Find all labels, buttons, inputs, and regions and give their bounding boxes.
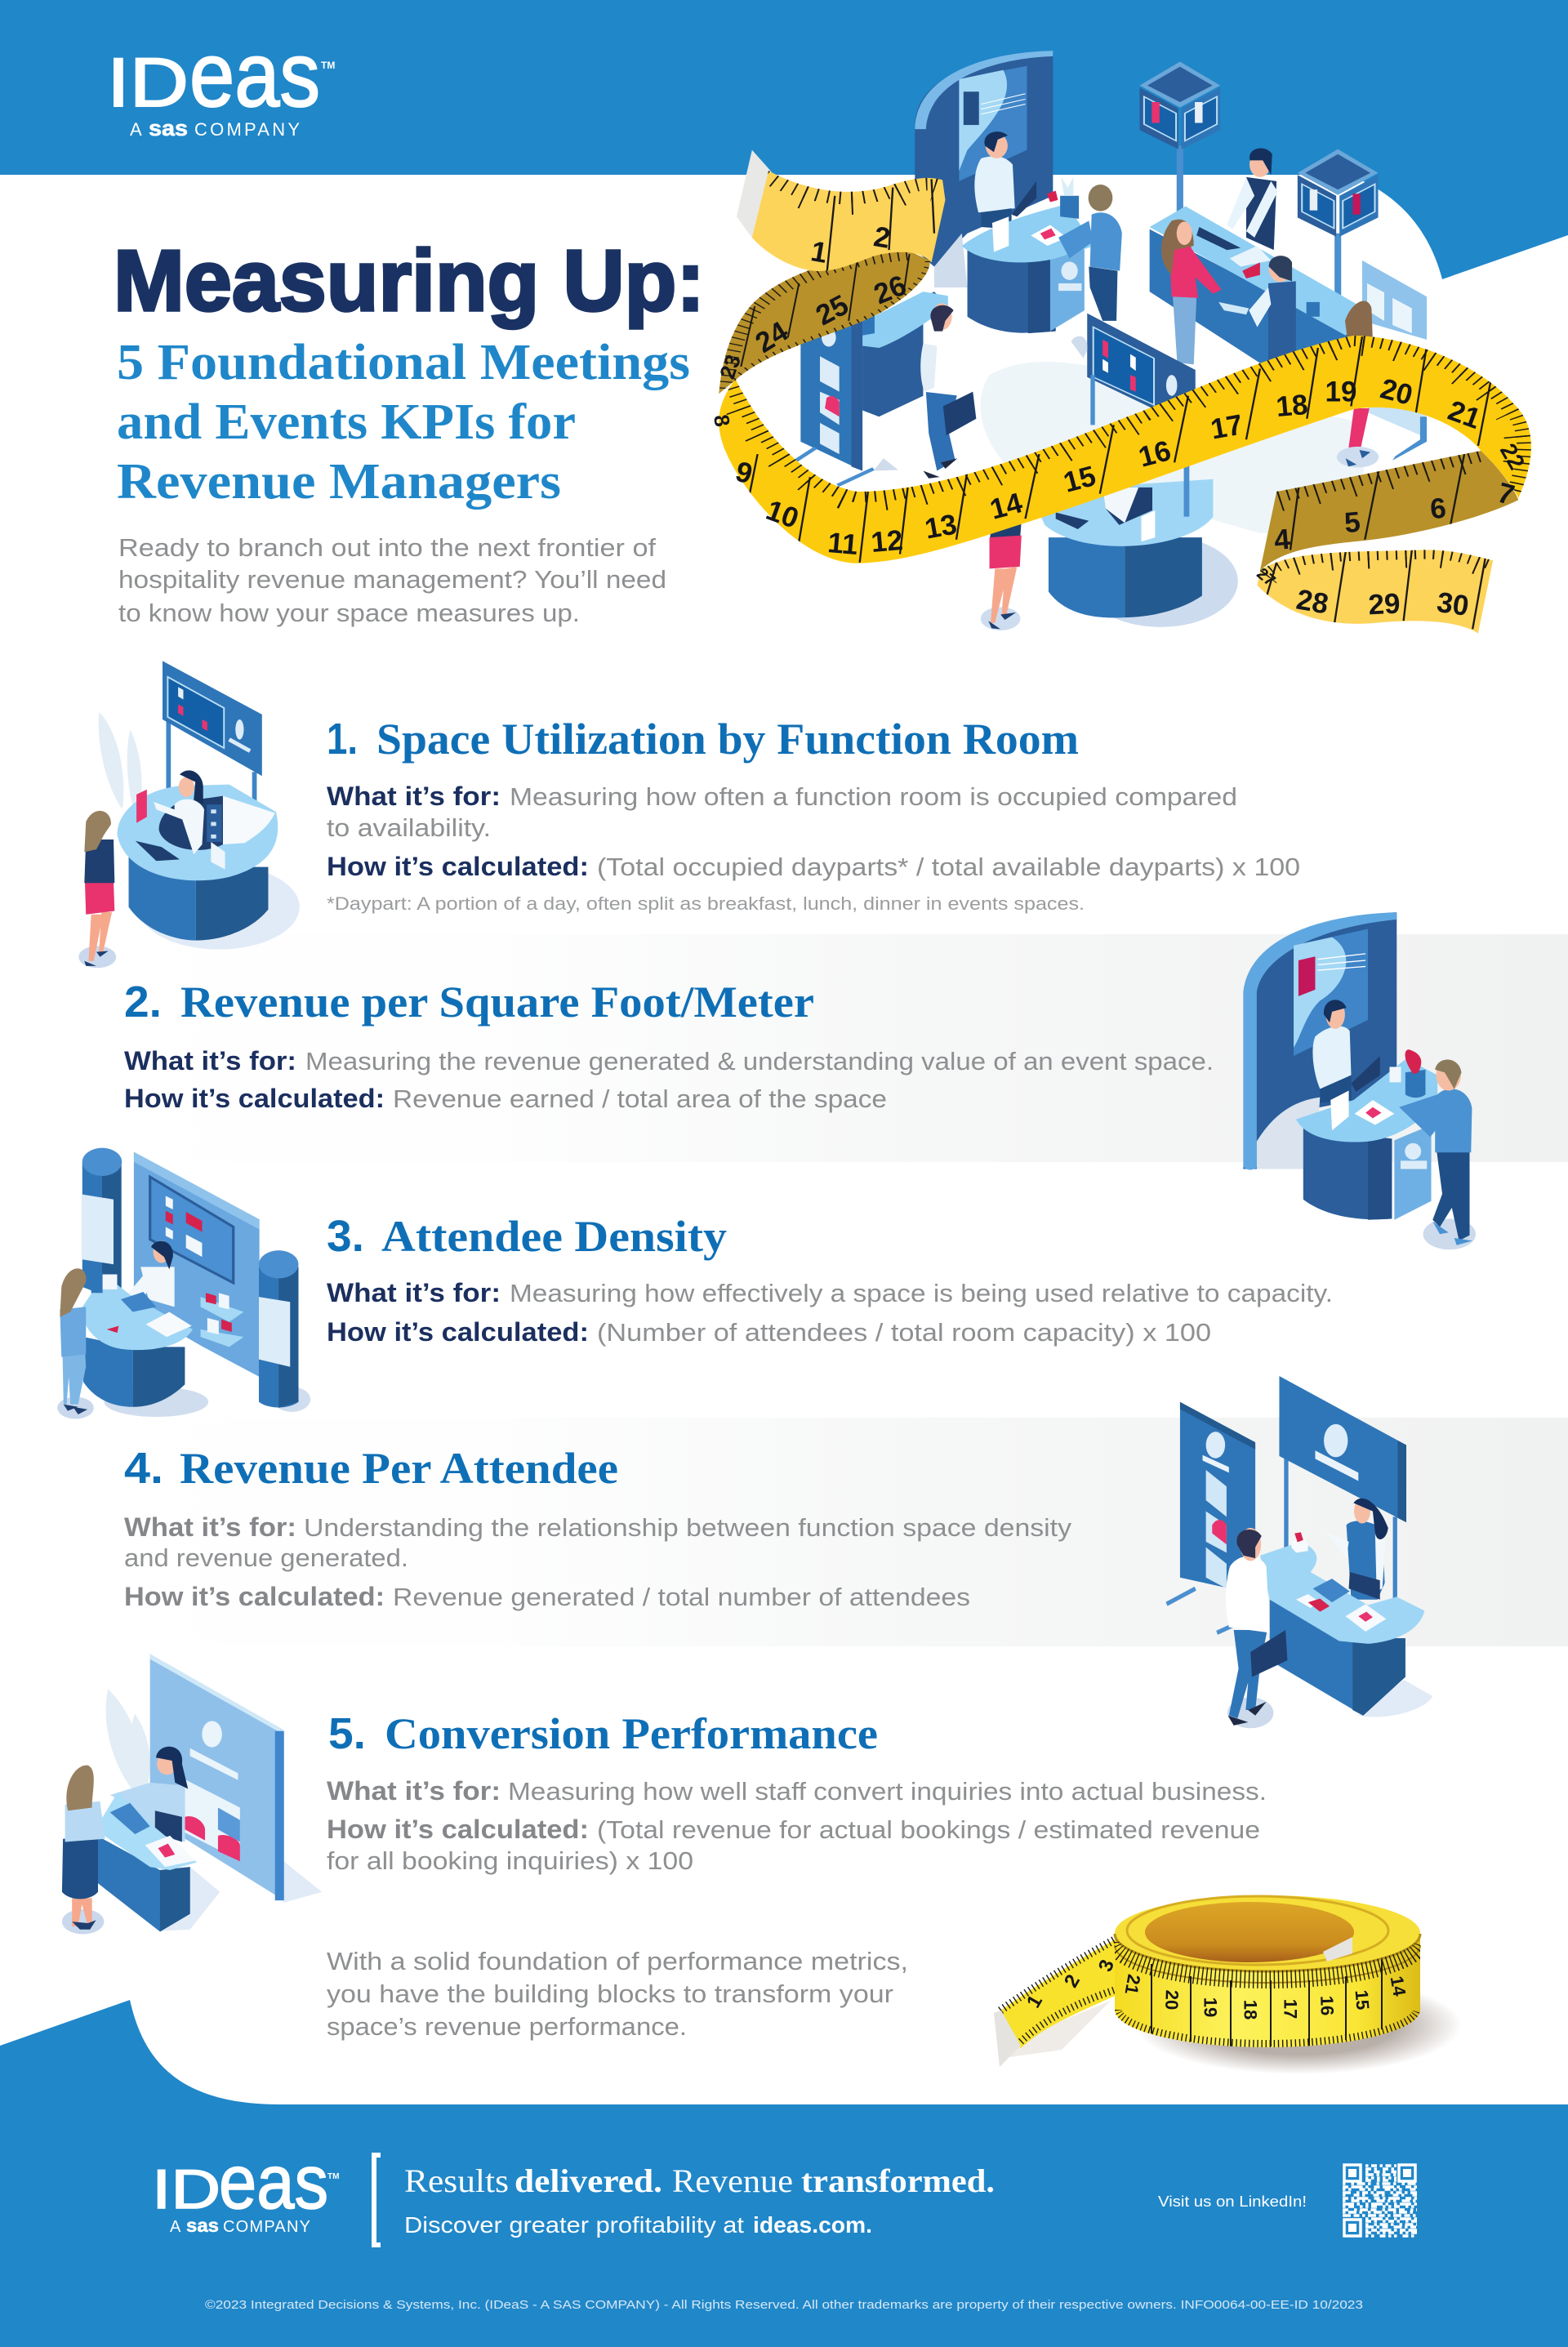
tape numbers: 18 <box>1275 389 1309 423</box>
tape numbers: 1 <box>808 235 830 269</box>
footer tagline: delivered. <box>514 2162 662 2199</box>
booth A counter <box>962 177 1094 333</box>
coil body: 16 <box>1316 1995 1338 2016</box>
section 4 text: Revenue generated / total number of attendees <box>393 1583 970 1611</box>
section 1 text: Measuring how often a function room is occupied compared <box>510 782 1237 811</box>
tape light front left <box>752 171 945 271</box>
footer tagline: Revenue <box>672 2162 793 2199</box>
section 5 text <box>327 1709 1267 1875</box>
logo: IDeaS header: eas <box>189 24 320 126</box>
woman in pink top <box>1161 220 1222 364</box>
tape numbers: 28 <box>1294 583 1331 621</box>
tape numbers: 9 <box>733 456 755 490</box>
section 4 text: and revenue generated. <box>124 1543 408 1572</box>
tape numbers: 8 <box>709 412 735 429</box>
tape numbers: 22 <box>1495 439 1530 474</box>
coil tail: 2 <box>1060 1971 1085 1992</box>
logo: IDeaS header <box>107 24 335 140</box>
heading 5: Conversion Performance <box>385 1709 878 1758</box>
section 2 illustration: curved wall booth <box>1243 912 1476 1249</box>
staff woman <box>125 1241 175 1307</box>
tape numbers: 21 <box>1444 394 1485 435</box>
intro text: to know how your space measures up. <box>118 599 580 627</box>
booth B cube 1 on pole <box>1139 62 1220 216</box>
section 2 text: How it’s calculated: <box>124 1084 385 1113</box>
tape numbers: 16 <box>1135 434 1174 474</box>
booth A staff person <box>974 131 1036 229</box>
section 4 band <box>0 1418 1568 1646</box>
hero booths scene <box>796 51 1427 630</box>
right side panel and woman <box>1337 261 1427 467</box>
booth B long counter <box>1150 207 1368 367</box>
intro text: hospitality revenue management? You’ll need <box>118 565 666 594</box>
tape numbers: 17 <box>1208 408 1245 446</box>
booth B staff man <box>1227 149 1277 250</box>
tape dark back right <box>1260 451 1518 571</box>
coil tail: 3 <box>1094 1957 1119 1975</box>
section 5 text: How it’s calculated: <box>327 1815 589 1844</box>
section 2 text <box>124 978 1214 1113</box>
section 2 text: What it’s for: <box>124 1046 296 1076</box>
section 2 band <box>0 934 1568 1162</box>
section 4 text: Understanding the relationship between function space density <box>304 1513 1072 1542</box>
logo: IDeaS header: TM <box>321 60 335 71</box>
woman in pink skirt <box>981 521 1022 630</box>
footer bracket <box>372 2153 381 2247</box>
closing text: With a solid foundation of performance metrics, <box>327 1947 908 1975</box>
booth A visitor <box>1058 185 1122 321</box>
coil body: 17 <box>1281 1999 1300 2019</box>
staff woman <box>110 1747 188 1842</box>
hero illustration: event booths and measuring tape <box>709 51 1531 634</box>
footer logo: TM <box>327 2172 339 2181</box>
coil body <box>1115 1895 1420 2047</box>
footer logo: COMPANY <box>223 2218 310 2236</box>
heading 4: Revenue Per Attendee <box>180 1444 618 1493</box>
footer call to action: ideas.com. <box>753 2212 872 2238</box>
footer logo: ID <box>152 2158 220 2220</box>
header blue shape <box>0 0 1568 279</box>
subtitle: 5 Foundational Meetings <box>117 335 690 390</box>
heading 2: 2. <box>124 978 162 1027</box>
man with briefcase <box>874 303 976 479</box>
logo: IDeaS header: COMPANY <box>194 119 300 140</box>
tape numbers: 4 <box>1273 523 1292 556</box>
closing text <box>327 1947 908 2041</box>
lower center round booth <box>1040 458 1238 627</box>
logo: IDeaS header: sas <box>149 116 188 140</box>
logo: IDeaS header: A <box>130 119 142 140</box>
footer tagline: Results <box>404 2162 509 2199</box>
tape numbers: 10 <box>762 494 803 535</box>
coil body: 19 <box>1200 1997 1220 2017</box>
tape dark back left <box>719 250 930 394</box>
section 3 text: What it’s for: <box>327 1278 501 1307</box>
section 4 text: What it’s for: <box>124 1512 296 1542</box>
heading 2: Revenue per Square Foot/Meter <box>180 978 814 1027</box>
tape numbers: 20 <box>1377 372 1416 412</box>
tape numbers: 30 <box>1435 586 1471 622</box>
linkedin label: Visit us on LinkedIn! <box>1158 2193 1307 2210</box>
section 4 illustration: counter booth with banner <box>1167 1376 1432 1728</box>
tape main yellow <box>719 336 1531 563</box>
visitor man <box>1399 1060 1476 1249</box>
section 4 text: How it’s calculated: <box>124 1582 385 1611</box>
section 3 text <box>327 1212 1333 1347</box>
measuring tape ribbon <box>719 150 1531 634</box>
counter <box>81 1271 193 1407</box>
footer call to action: Discover greater profitability at <box>404 2212 744 2238</box>
counter <box>1260 1532 1424 1716</box>
tape numbers: 13 <box>922 508 960 546</box>
QR code <box>1343 2163 1417 2238</box>
tape numbers: 26 <box>870 269 911 310</box>
section 1 text: (Total occupied dayparts* / total available dayparts) x 100 <box>597 853 1300 881</box>
section 3 text: (Number of attendees / total room capacity) x 100 <box>597 1318 1211 1347</box>
visitor woman <box>78 811 116 968</box>
footer call to action <box>404 2212 872 2238</box>
section 3 text: Measuring how effectively a space is being used relative to capacity. <box>510 1279 1333 1307</box>
tape numbers: 6 <box>1429 492 1447 525</box>
heading 3: Attendee Density <box>381 1212 727 1261</box>
heading 4: 4. <box>124 1444 163 1493</box>
footer logo: sas <box>186 2215 219 2236</box>
closing text: you have the building blocks to transform your <box>327 1980 893 2008</box>
visitor woman <box>57 1268 94 1418</box>
footer logo: eas <box>219 2139 328 2225</box>
section 1 text: How it’s calculated: <box>327 852 589 881</box>
title: Measuring Up: <box>114 233 705 329</box>
staff man <box>1312 1000 1380 1102</box>
tape numbers: 11 <box>826 527 859 561</box>
section 2 text: Measuring the revenue generated & understanding value of an event space. <box>305 1047 1214 1076</box>
subtitle: and Events KPIs for <box>117 394 576 450</box>
section 5 text: What it’s for: <box>327 1776 501 1806</box>
staff woman <box>1325 1499 1388 1600</box>
footer blue shape <box>0 2000 1568 2347</box>
lower left booth <box>796 292 948 485</box>
visitor woman <box>62 1766 105 1934</box>
tape numbers <box>709 220 1530 622</box>
footer logo <box>152 2139 339 2236</box>
heading 1: Space Utilization by Function Room <box>376 715 1079 764</box>
coil body: 21 <box>1121 1973 1144 1996</box>
heading 5: 5. <box>328 1709 366 1758</box>
coil tail: 1 <box>1022 1991 1047 2012</box>
center display board <box>1071 314 1196 425</box>
section 1 text: to availability. <box>327 813 491 842</box>
section 1 text: *Daypart: A portion of a day, often split as breakfast, lunch, dinner in events spaces. <box>327 893 1085 914</box>
tape numbers: 12 <box>870 524 904 559</box>
intro text: Ready to branch out into the next frontier of <box>118 533 656 562</box>
tape numbers: 29 <box>1368 588 1401 621</box>
intro text <box>118 533 666 627</box>
counter <box>95 1792 197 1931</box>
coiled measuring tape illustration <box>994 1895 1462 2074</box>
heading 3: 3. <box>327 1212 364 1261</box>
subtitle <box>117 335 690 510</box>
tape numbers: 19 <box>1325 376 1356 408</box>
closing text: space’s revenue performance. <box>327 2012 687 2041</box>
tape numbers: 23 <box>715 351 746 382</box>
coil body: 20 <box>1161 1989 1183 2011</box>
tape numbers: 25 <box>811 289 853 332</box>
coil body: 14 <box>1387 1975 1410 1998</box>
tape numbers: 14 <box>987 487 1026 526</box>
section 1 illustration: round booth <box>78 661 300 968</box>
coil body: 18 <box>1240 2000 1261 2020</box>
coil body: 15 <box>1351 1989 1374 2011</box>
counter <box>1296 1049 1437 1220</box>
visitor man with briefcase <box>1226 1528 1287 1728</box>
man in navy vest <box>1218 256 1296 364</box>
subtitle: Revenue Managers <box>117 454 561 510</box>
footer logo: A <box>170 2218 181 2236</box>
booth B cube 2 on pole <box>1298 149 1379 317</box>
section 5 illustration: light wall booth <box>62 1654 322 1934</box>
section 3 text: How it’s calculated: <box>327 1317 589 1347</box>
heading 1: 1. <box>327 715 358 764</box>
tape numbers: 27 <box>1253 564 1279 590</box>
coil tail <box>994 1939 1119 2067</box>
tape numbers: 7 <box>1494 477 1517 511</box>
tape numbers: 24 <box>750 315 794 359</box>
tape numbers: 5 <box>1343 506 1361 539</box>
section 3 illustration: wall booth with columns <box>57 1148 310 1418</box>
section 4 text <box>124 1444 1072 1611</box>
tape white end tip <box>737 150 772 238</box>
section 5 text: Measuring how well staff convert inquiries into actual business. <box>508 1777 1267 1806</box>
section 2 text: Revenue earned / total area of the space <box>393 1084 887 1113</box>
tape numbers: 15 <box>1060 460 1099 499</box>
footer tagline <box>404 2162 995 2199</box>
copyright line: ©2023 Integrated Decisions & Systems, Inc. (IDeaS - A SAS COMPANY) - All Rights Reserved. All other trademarks are property of their respective owners. INFO0064-00-EE-ID 10/2023 <box>205 2298 1363 2312</box>
tape light front right <box>1257 550 1493 634</box>
logo: IDeaS header: ID <box>107 44 189 121</box>
section 5 text: (Total revenue for actual bookings / estimated revenue <box>597 1815 1260 1844</box>
section 1 text <box>327 715 1300 914</box>
tape numbers: 2 <box>871 220 893 255</box>
section 1 text: What it’s for: <box>327 782 501 811</box>
section 5 text: for all booking inquiries) x 100 <box>327 1846 693 1875</box>
booth A curved wall <box>915 51 1053 287</box>
footer tagline: transformed. <box>801 2162 995 2199</box>
